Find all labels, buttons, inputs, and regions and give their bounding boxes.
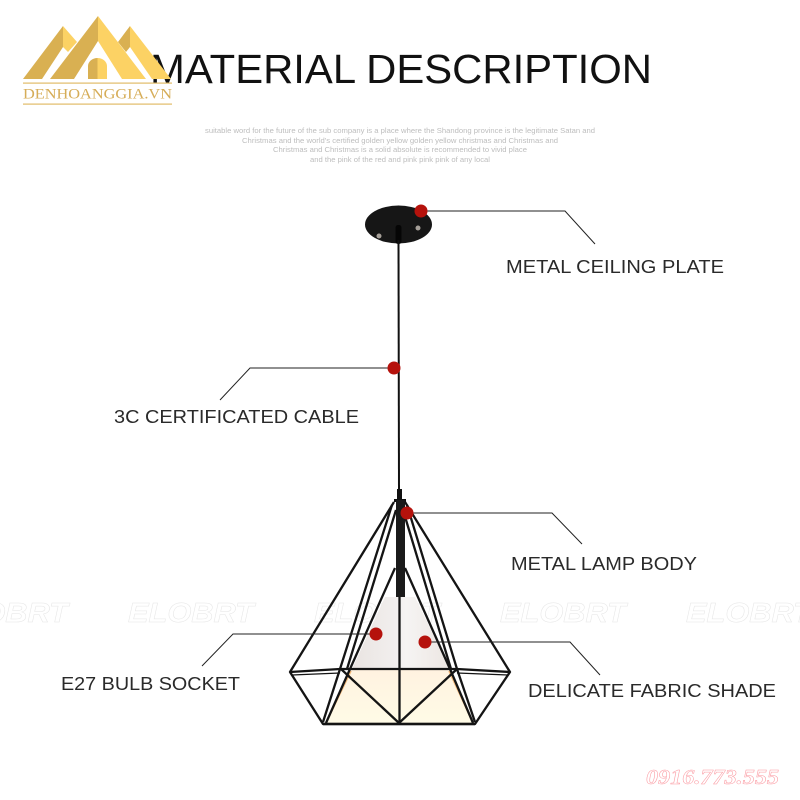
watermark row: ELOBRT (686, 597, 800, 628)
title: MATERIAL DESCRIPTION (150, 46, 652, 92)
lamp holder (394, 489, 406, 597)
metal cage (290, 502, 510, 724)
callout: delicate fabric shade: DELICATE FABRIC SHADE (528, 680, 776, 701)
watermark row: ELOBRT (128, 597, 257, 628)
logo: centre roof (50, 16, 146, 79)
ceiling plate (365, 206, 432, 244)
description paragraph (205, 126, 595, 164)
callout: metal ceiling plate: METAL CEILING PLATE (506, 256, 724, 277)
callout: E27 bulb socket (61, 628, 382, 694)
callout: delicate fabric shade (418, 636, 776, 701)
callout: metal lamp body (400, 506, 697, 574)
logo: left roof (23, 26, 77, 79)
watermark row: ELOBRT (314, 597, 443, 628)
callout: 3C certificated cable: 3C CERTIFICATED CABLE (114, 406, 359, 427)
logo: door (88, 58, 107, 79)
logo: wordmark: DENHOANGGIA.VN (23, 86, 172, 102)
description paragraph: suitable word for the future of the sub company is a place where the Shandong province is the legitimate Satan and (205, 126, 595, 135)
watermark row: ELOBRT (500, 597, 629, 628)
logo (23, 16, 172, 105)
description paragraph: and the pink of the red and pink pink pink of any local (310, 155, 490, 164)
logo: right roof (118, 26, 171, 79)
cable (398, 240, 400, 492)
callout: metal lamp body: METAL LAMP BODY (511, 553, 697, 574)
lamp (290, 206, 510, 724)
callout: 3C certificated cable (114, 362, 400, 427)
fabric shade (325, 597, 474, 723)
description paragraph: Christmas and Christmas is a solid absolute is recommended to vivid place (273, 145, 527, 154)
callout: metal ceiling plate (414, 204, 724, 277)
phone number: 0916.773.555 (646, 765, 779, 789)
description paragraph: Christmas and the world's certified golden yellow golden yellow christmas and Christmas and (242, 136, 558, 145)
watermark row (0, 597, 800, 628)
callout: E27 bulb socket: E27 BULB SOCKET (61, 673, 240, 694)
